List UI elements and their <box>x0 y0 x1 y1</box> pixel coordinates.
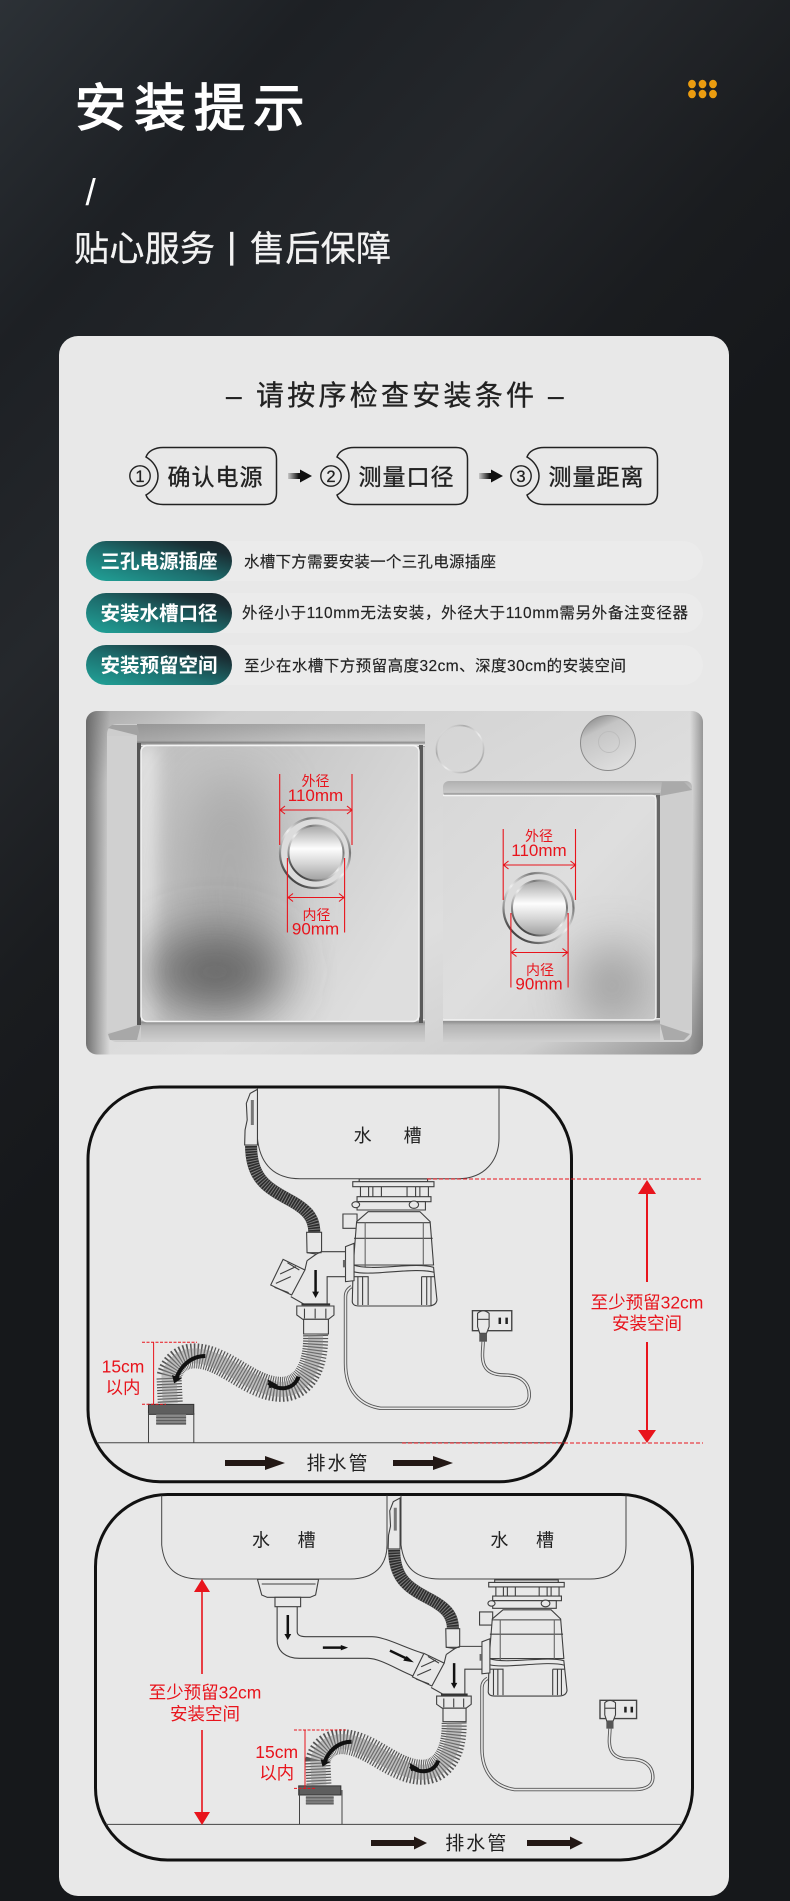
disposer assembly <box>148 1089 529 1425</box>
step 3 <box>511 448 658 504</box>
step 1 <box>130 448 276 504</box>
dimensions left: 外径 <box>302 773 330 789</box>
15cm label: 15cm <box>102 1356 144 1376</box>
row: sink outlet diameter: 外径小于110mm无法安装，外径大于110mm需另外备注变径器 <box>242 604 688 622</box>
arrow 2 <box>479 470 503 482</box>
panel: install conditions <box>59 336 729 1896</box>
step 3: 3 <box>516 468 526 486</box>
sink labels: 水 <box>490 1530 508 1550</box>
dimensions right: 外径 <box>525 828 553 844</box>
row: installation clearance: 至少在水槽下方预留高度32cm、深度30cm的安装空间 <box>244 657 626 675</box>
sink labels: 水 <box>252 1530 270 1550</box>
corner hole <box>436 725 484 773</box>
row: sink outlet diameter: 安装水槽口径 <box>100 603 218 625</box>
drain left <box>280 818 350 888</box>
step 1: 确认电源 <box>168 464 262 490</box>
dimensions right: 90mm <box>515 974 563 994</box>
heading: – <box>548 380 564 411</box>
left basin <box>107 724 425 1042</box>
clearance label: 至少预留32cm <box>149 1682 261 1702</box>
row: installation clearance: 安装预留空间 <box>100 654 218 677</box>
floor and pipe stub <box>98 1413 564 1443</box>
clearance arrow <box>201 1592 203 1812</box>
dimensions right: 110mm <box>511 841 567 860</box>
arrow: drain right <box>527 1836 583 1850</box>
step 2: 测量口径 <box>358 464 454 490</box>
step 2: 2 <box>326 468 336 486</box>
sink labels: 槽 <box>536 1530 554 1550</box>
dimensions left: 110mm <box>288 786 343 805</box>
icon: orange dots <box>688 80 717 98</box>
dimensions right <box>503 828 576 994</box>
diagram 2: double bowl installation <box>96 1494 692 1860</box>
slash: / <box>86 172 96 213</box>
row: installation clearance <box>86 645 703 685</box>
drain right <box>504 873 574 943</box>
15cm label: 15cm <box>255 1742 298 1762</box>
dimensions left: 内径 <box>302 907 330 923</box>
subtitle: 售后保障 <box>250 230 391 269</box>
dimensions right: 内径 <box>526 962 554 978</box>
step 1: 1 <box>135 468 145 486</box>
15cm guide <box>294 1730 346 1788</box>
step 2 <box>321 448 468 504</box>
clearance dashed guides <box>402 1179 703 1443</box>
sink <box>257 1088 499 1179</box>
step 3: 测量距离 <box>548 464 644 490</box>
sink label: 水 <box>354 1126 372 1146</box>
diagram 1: single bowl installation <box>88 1087 703 1482</box>
floor and pipe stub <box>106 1790 682 1824</box>
row: power socket: 水槽下方需要安装一个三孔电源插座 <box>244 553 496 571</box>
arrow: drain left <box>371 1836 427 1850</box>
row: power socket: 三孔电源插座 <box>100 550 218 573</box>
arrow: drain left <box>225 1456 285 1470</box>
sink photo <box>86 711 703 1055</box>
left drain and connecting pipe <box>257 1579 423 1677</box>
sink label: 槽 <box>404 1126 422 1146</box>
subtitle: | <box>227 225 236 266</box>
right basin <box>443 781 692 1042</box>
clearance label: 安装空间 <box>170 1704 240 1724</box>
15cm guide <box>142 1342 197 1404</box>
dimensions left: 90mm <box>292 920 339 938</box>
15cm label: 以内 <box>106 1378 140 1398</box>
subtitle: 贴心服务 <box>74 230 215 269</box>
15cm vertical <box>304 1730 306 1788</box>
soap dispenser <box>580 716 636 770</box>
right sink <box>401 1496 626 1579</box>
arrow: drain right <box>393 1456 453 1470</box>
row: sink outlet diameter <box>86 593 703 633</box>
drain label: 排水管 <box>445 1832 508 1854</box>
15cm vertical <box>153 1342 155 1404</box>
clearance arrow <box>646 1190 648 1433</box>
title: 安装提示 <box>75 80 305 137</box>
clearance label: 至少预留32cm <box>591 1292 703 1312</box>
clearance label: 安装空间 <box>612 1314 682 1334</box>
sink labels: 槽 <box>298 1530 316 1550</box>
dimensions left <box>280 773 352 938</box>
heading: 请按序检查安装条件 <box>256 380 534 411</box>
heading: – <box>226 380 242 411</box>
15cm label: 以内 <box>259 1763 294 1783</box>
drain label: 排水管 <box>306 1452 370 1474</box>
disposer assembly <box>299 1498 653 1805</box>
row: power socket <box>86 541 703 581</box>
arrow 1 <box>288 470 312 482</box>
left sink <box>162 1496 387 1579</box>
